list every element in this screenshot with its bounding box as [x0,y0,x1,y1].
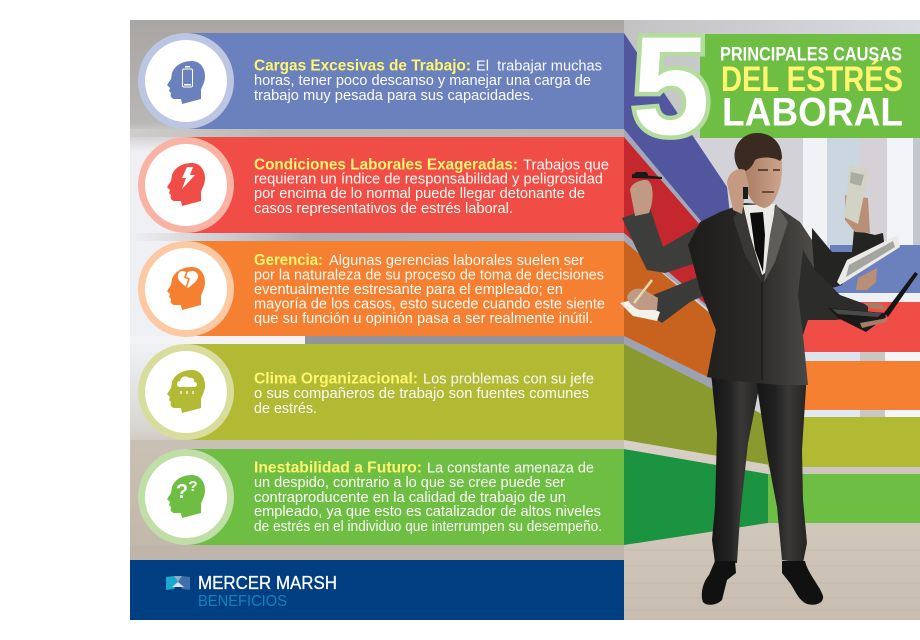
text: cargas excesivas: trabajo muy pesada para sus capacidades. [254,87,534,104]
text: condiciones laborales: requieran un índice de responsabilidad y peligrosidad [254,170,603,188]
text: condiciones laborales: por encima de lo normal puede llegar detonante de [254,185,585,202]
text: inestabilidad [254,460,602,535]
icon: head with lightning [142,140,230,230]
text: inestabilidad: contraproducente en la calidad de trabajo de un [254,489,566,506]
perspective bands behind the man [624,33,920,545]
text: clima organizacional: o sus compañeros de trabajo son fuentes comunes [254,385,589,402]
text: gerencia: Gerencia: [254,252,323,269]
panel: gerencia [142,241,624,336]
icon: mercer marsh mark [166,576,190,590]
panel: condiciones laborales [142,137,624,233]
panel: inestabilidad a futuro [142,449,624,545]
text: clima organizacional: Clima Organizacional: [254,370,418,388]
man with six arms [620,133,918,605]
footer: mercer marsh logo [130,560,624,620]
text: inestabilidad: empleado, ya que esto es catalizador de altos niveles [254,503,601,520]
text: condiciones laborales: casos representativos de estrés laboral. [254,200,513,217]
heading line 3: LABORAL [722,90,903,134]
panel: clima organizacional [142,344,624,440]
head [727,133,782,214]
right arm with tablet [837,235,900,290]
text: clima organizacional: de estrés. [254,400,317,417]
text: beneficios: BENEFICIOS [198,593,287,610]
text: gerencia: por la naturaleza de su proceso de toma de decisiones [254,266,604,284]
icon: head with battery [142,36,230,126]
text: company name: MERCER MARSH [198,573,337,593]
text: cargas excesivas: horas, tener poco descanso y manejar una carga de [254,72,591,89]
upper left arm with pen [622,172,712,273]
text: gerencia [254,252,605,327]
text: gerencia: que su función u opinión pasa a ser realmente inútil. [254,310,593,327]
text: clima organizacional [254,370,594,417]
numeral 5: 5 [632,7,710,164]
text: cargas excesivas [254,58,602,104]
text: condiciones laborales: Condiciones Laborales Exageradas: [254,156,518,173]
right arm holding calculator [812,165,884,290]
icon: head with question marks: ? [176,481,188,503]
text: condiciones laborales: Trabajos que [523,156,609,173]
torso and jacket [688,203,815,385]
panel: cargas excesivas [142,33,624,129]
icon: head with broken heart [142,244,230,334]
icon: head with question marks: ? [188,478,198,495]
icon: head with cloud [142,348,230,436]
icon: head with question marks [142,452,230,542]
lower left arm and notepad [620,275,715,323]
text: clima organizacional: Los problemas con su jefe [423,370,594,388]
text: gerencia: eventualmente estresante para el empleado; en [254,281,563,298]
text: inestabilidad: Inestabilidad a Futuro: [254,460,422,476]
text: condiciones laborales [254,156,609,217]
text: inestabilidad: La constante amenaza de [427,460,594,476]
text: gerencia: Algunas gerencias laborales suelen ser [329,252,584,269]
text: inestabilidad: de estrés en el individuo que interrumpen su desempeño. [254,518,602,535]
lower right arm with laptop [798,250,918,335]
shoes [702,561,823,605]
text: gerencia: mayoría de los casos, esto sucede cuando este siente [254,296,605,312]
text: cargas excesivas: El trabajar muchas [476,58,602,74]
text: inestabilidad: un despido, contrario a lo que se cree puede ser [254,474,565,491]
title block [632,7,920,164]
text: cargas excesivas: Cargas Excesivas de Trabajo: [254,58,471,74]
legs [710,365,807,563]
